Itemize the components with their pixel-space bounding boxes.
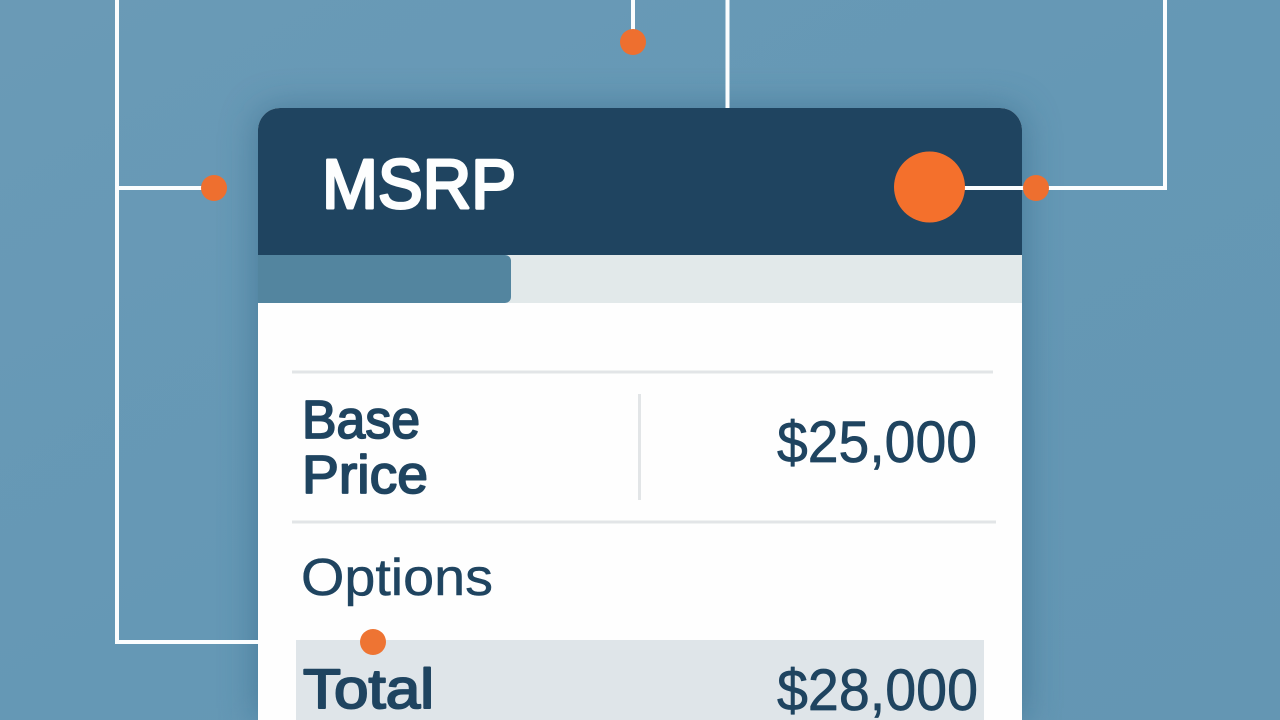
label: Base Price: Price	[302, 445, 428, 505]
label: Options: Options	[301, 549, 493, 607]
label: Base Price	[302, 390, 428, 505]
node: left connector dot	[201, 175, 227, 201]
node: total row dot	[360, 629, 386, 655]
connector inside header	[960, 186, 1030, 190]
node: top connector dot	[620, 29, 646, 55]
card body	[258, 108, 1022, 720]
card header band	[258, 108, 1022, 255]
panel: MSRP card	[258, 108, 1022, 720]
node: right connector dot	[1023, 175, 1049, 201]
total row highlight	[296, 640, 984, 720]
icon: large orange status dot	[894, 152, 965, 222]
value: base price: $25,000	[777, 410, 977, 475]
label: Base Price: Base	[302, 390, 420, 450]
connector lines	[117, 0, 1165, 642]
label: Total: Total	[303, 657, 434, 720]
progress bar fill	[258, 255, 511, 303]
heading: MSRP: MSRP	[322, 145, 516, 223]
card shadow	[256, 108, 1024, 720]
progress bar track	[506, 255, 1022, 303]
table row dividers	[292, 372, 996, 522]
